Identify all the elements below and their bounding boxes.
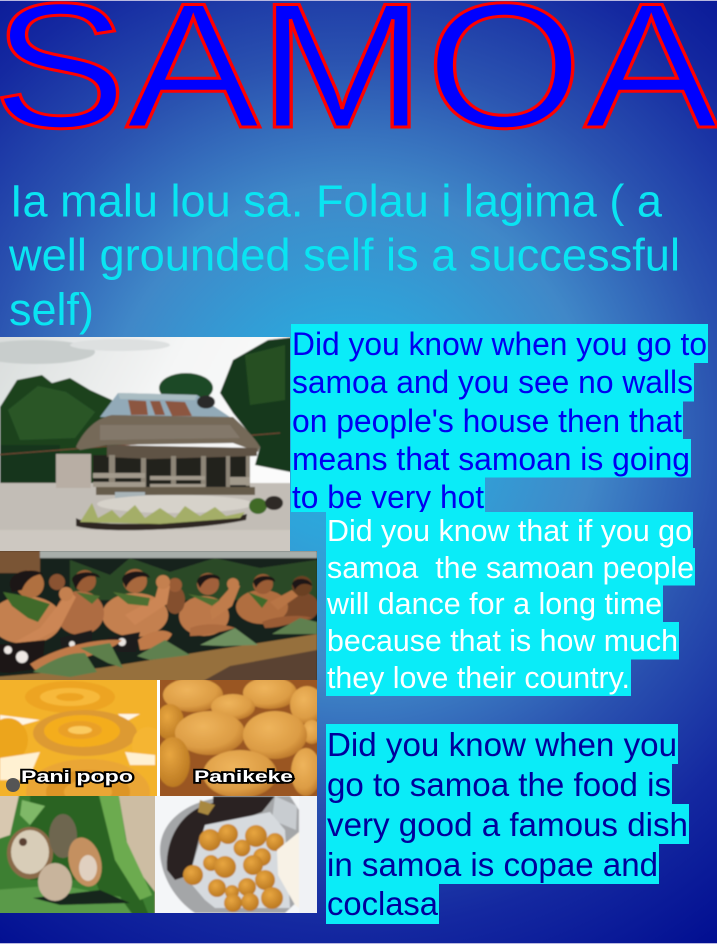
subtitle motto: well grounded self is a successful	[8, 230, 680, 280]
text block: dancing: because that is how much	[327, 624, 678, 658]
white divider between food photos	[157, 680, 160, 796]
text block: houses with no walls	[291, 324, 708, 515]
text block: food	[326, 724, 689, 924]
text block: houses with no walls: means that samoan is going	[292, 440, 690, 477]
photo: coclasa in a pot	[155, 796, 317, 913]
text block: food: coclasa	[327, 885, 439, 922]
text block: food: Did you know when you	[327, 726, 677, 763]
text block: houses with no walls: to be very hot	[292, 478, 484, 515]
text block: dancing: will dance for a long time	[326, 587, 662, 621]
text block: dancing: samoa the samoan people	[327, 551, 694, 585]
subtitle motto	[8, 176, 680, 335]
subtitle motto: self)	[9, 284, 94, 335]
photo: Samoan fale house	[0, 337, 290, 551]
text block: houses with no walls: samoa and you see no walls	[292, 363, 693, 400]
photo: Panikeke	[160, 680, 317, 796]
icon: lens badge	[6, 778, 20, 792]
text block: food: in samoa is copae and	[327, 846, 658, 883]
text block: dancing	[326, 512, 695, 696]
photo: Panikeke: Panikeke	[194, 767, 293, 786]
text block: houses with no walls: Did you know when you go to	[292, 325, 707, 362]
photo: Pani popo: Pani popo	[21, 767, 133, 786]
text block: dancing: Did you know that if you go	[327, 514, 692, 548]
text block: food: go to samoa the food is	[327, 766, 671, 803]
subtitle motto: Ia malu lou sa. Folau i lagima ( a	[10, 176, 663, 226]
photo: copae dish on leaves	[0, 796, 155, 913]
photo: Samoan dancers	[0, 551, 317, 680]
photo: Pani popo	[0, 680, 157, 796]
text block: houses with no walls: on people's house then that	[292, 402, 682, 439]
text block: food: very good a famous dish	[327, 806, 688, 843]
text block: dancing: they love their country.	[327, 661, 630, 695]
